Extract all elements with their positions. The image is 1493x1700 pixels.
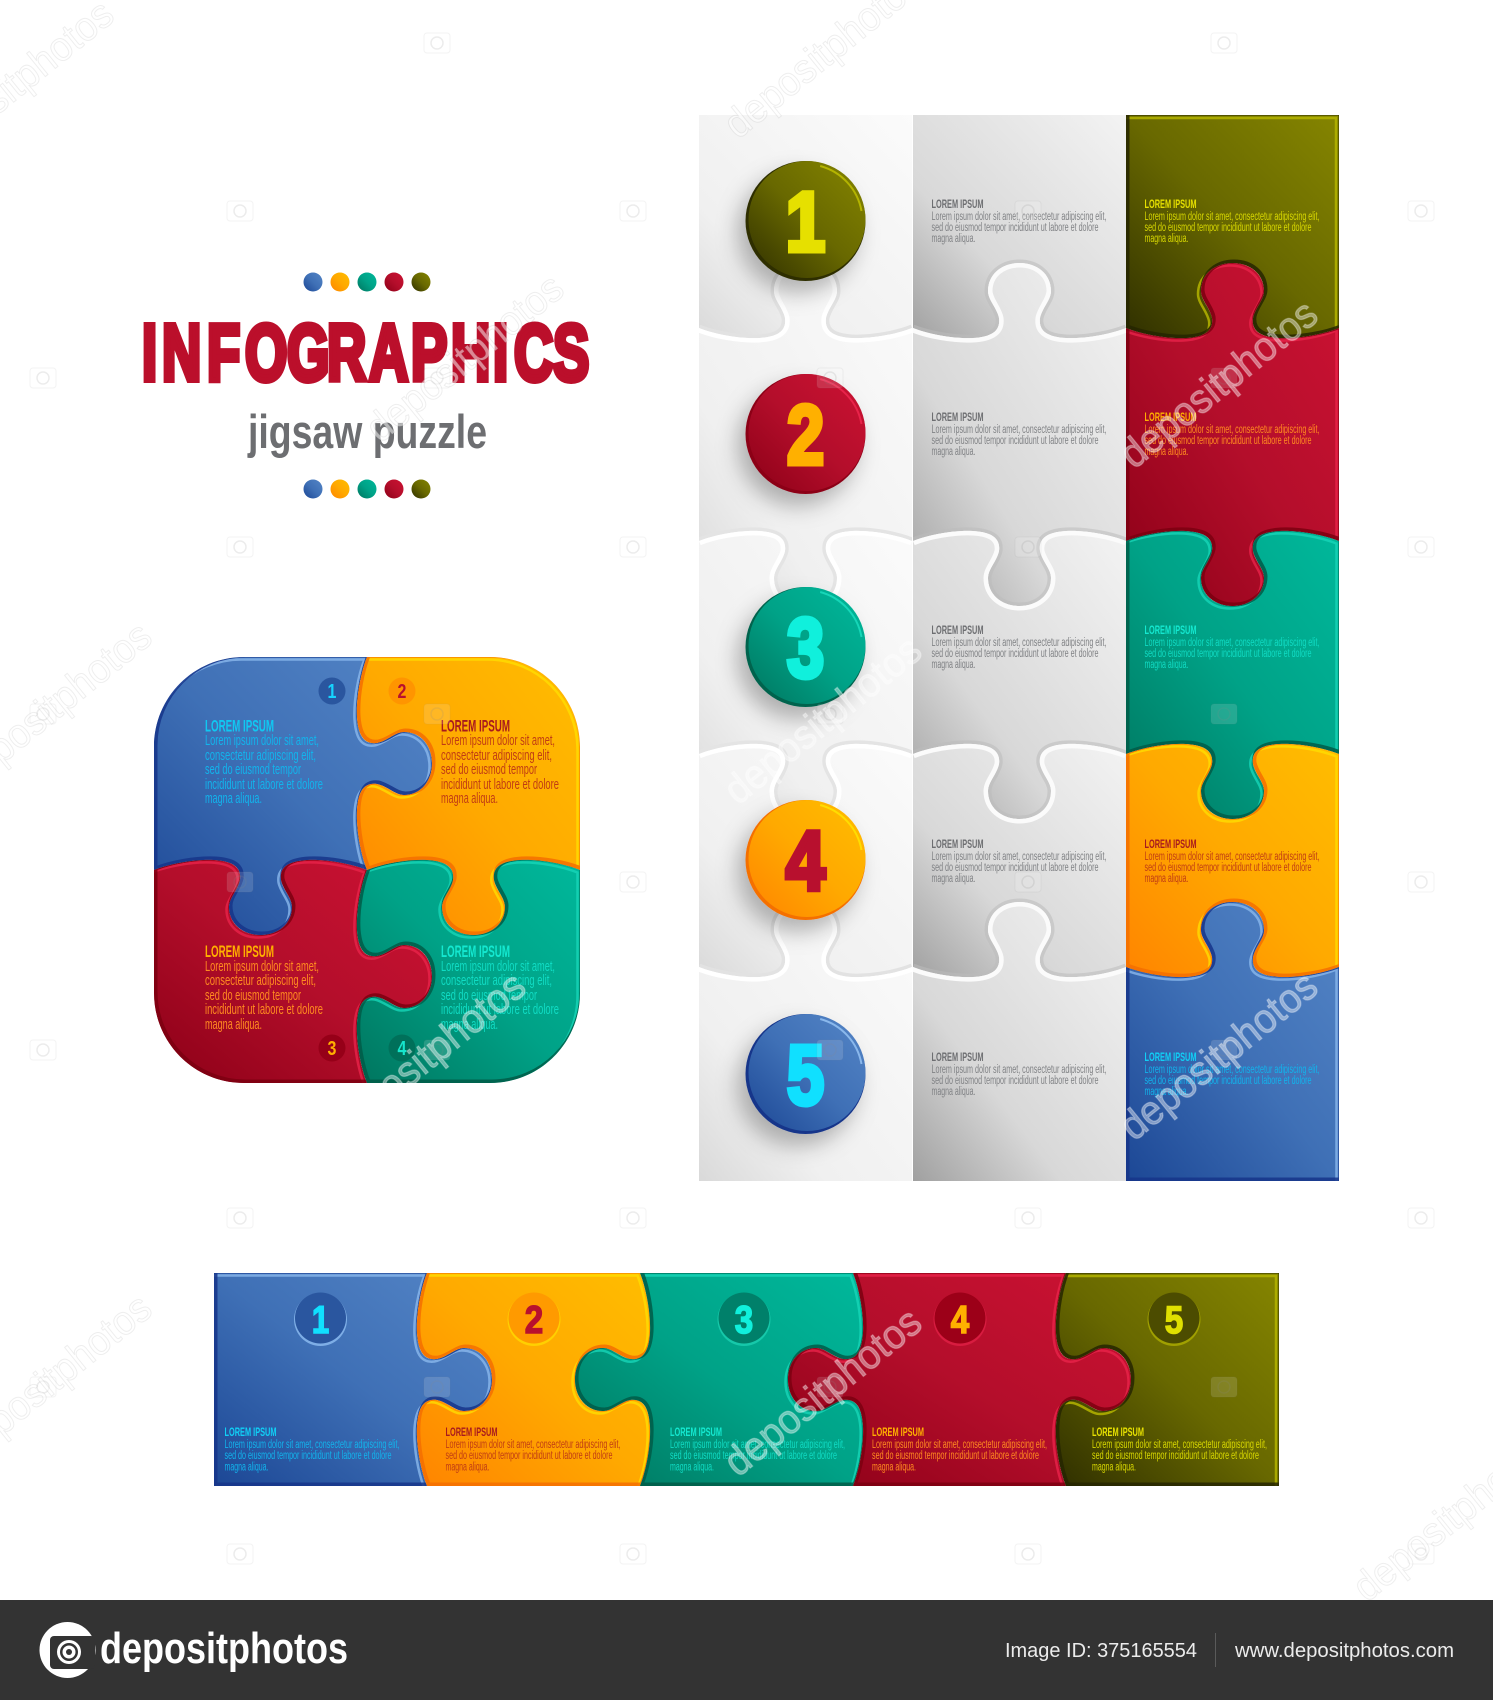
text blue: [1144, 1050, 1320, 1098]
text row 4: sed do eiusmod tempor incididunt ut labore et dolore: [932, 862, 1098, 874]
text row 4: Lorem ipsum dolor sit amet, consectetur adipiscing elit,: [932, 851, 1106, 863]
badge 4: 4: [398, 1037, 406, 1059]
text row 1: [932, 197, 1106, 245]
text: blue piece: Lorem ipsum dolor sit amet,: [205, 733, 319, 749]
strip text teal: [670, 1425, 845, 1474]
text teal: sed do eiusmod tempor incididunt ut labore et dolore: [1144, 648, 1312, 660]
badge 4: [388, 1034, 416, 1062]
strip text red: sed do eiusmod tempor incididunt ut labore et dolore: [872, 1450, 1039, 1462]
strip text yellow: magna aliqua.: [446, 1462, 490, 1474]
grey piece 5: [913, 902, 1126, 1181]
panel: vertical puzzle column coloured with text: [1123, 114, 1340, 1184]
text teal: Lorem ipsum dolor sit amet, consectetur adipiscing elit,: [1144, 637, 1320, 649]
yellow piece: [1124, 742, 1340, 980]
badge 2: 2: [398, 680, 406, 702]
image id: Image ID: 375165554: [1005, 1639, 1197, 1662]
text row 2: [932, 410, 1106, 458]
strip text red: LOREM IPSUM: [872, 1425, 924, 1439]
text olive: [1144, 197, 1320, 245]
text row 4: LOREM IPSUM: [932, 837, 984, 851]
strip text olive: Lorem ipsum dolor sit amet, consectetur adipiscing elit,: [1092, 1439, 1267, 1451]
website url: www.depositphotos.com: [1234, 1639, 1454, 1662]
text olive: Lorem ipsum dolor sit amet, consectetur adipiscing elit,: [1144, 211, 1320, 223]
strip badge 2: 2: [525, 1297, 543, 1342]
text red: [1144, 410, 1320, 458]
piece: yellow: [354, 656, 582, 938]
text: red piece: magna aliqua.: [205, 1017, 262, 1033]
text: teal piece: incididunt ut labore et dolore: [441, 1002, 559, 1018]
text row 5: magna aliqua.: [932, 1086, 975, 1098]
text red: sed do eiusmod tempor incididunt ut labore et dolore: [1144, 435, 1312, 447]
text: teal piece: magna aliqua.: [441, 1017, 498, 1033]
text teal: [1144, 623, 1320, 671]
badge 1: [318, 678, 346, 704]
white piece 2: [699, 288, 912, 594]
watermark: diagonal depositphotos text: depositphotos: [319, 962, 534, 1149]
text yellow: Lorem ipsum dolor sit amet, consectetur adipiscing elit,: [1144, 851, 1320, 863]
text olive: magna aliqua.: [1144, 233, 1188, 245]
strip badge 5: [1148, 1292, 1200, 1346]
strip badge 3: 3: [735, 1297, 753, 1342]
text row 1: LOREM IPSUM: [932, 197, 984, 211]
text: yellow piece: sed do eiusmod tempor: [441, 762, 537, 778]
number circle 3: [746, 587, 866, 707]
text olive: LOREM IPSUM: [1144, 197, 1196, 211]
watermark: diagonal depositphotos text: depositphotos: [715, 626, 930, 813]
panel: vertical puzzle column grey with text: [913, 115, 1126, 1181]
strip text blue: Lorem ipsum dolor sit amet, consectetur adipiscing elit,: [224, 1439, 400, 1451]
number circle 2: [746, 374, 866, 494]
badge 3: 3: [328, 1037, 336, 1059]
strip piece olive: [1053, 1272, 1280, 1489]
strip text red: [872, 1425, 1047, 1474]
number circle 5: [746, 1014, 866, 1134]
text row 3: sed do eiusmod tempor incididunt ut labore et dolore: [932, 648, 1098, 660]
text row 4: [932, 837, 1106, 885]
strip text olive: magna aliqua.: [1092, 1462, 1136, 1474]
number circle 1: [746, 161, 866, 281]
piece: blue: [152, 656, 434, 938]
text: blue piece: magna aliqua.: [205, 791, 262, 807]
strip text yellow: sed do eiusmod tempor incididunt ut labore et dolore: [446, 1450, 612, 1462]
watermark: diagonal depositphotos text: depositphotos: [715, 1298, 930, 1485]
white piece 5: [699, 902, 912, 1181]
text row 2: magna aliqua.: [932, 446, 975, 458]
text: teal piece: Lorem ipsum dolor sit amet,: [441, 959, 555, 975]
blue piece: [1124, 900, 1340, 1184]
badge 2: [388, 678, 416, 704]
text row 5: Lorem ipsum dolor sit amet, consectetur adipiscing elit,: [932, 1064, 1106, 1076]
text blue: sed do eiusmod tempor incididunt ut labore et dolore: [1144, 1075, 1312, 1087]
strip text teal: sed do eiusmod tempor incididunt ut labore et dolore: [670, 1450, 837, 1462]
text row 5: LOREM IPSUM: [932, 1050, 984, 1064]
text row 1: sed do eiusmod tempor incididunt ut labore et dolore: [932, 222, 1098, 234]
text yellow: [1144, 837, 1320, 885]
text: teal piece: consectetur adipiscing elit,: [441, 973, 552, 989]
panel: four piece square puzzle: [152, 656, 582, 1086]
text: blue piece: sed do eiusmod tempor: [205, 762, 301, 778]
grey piece 1: [913, 115, 1126, 338]
text row 5: sed do eiusmod tempor incididunt ut labore et dolore: [932, 1075, 1098, 1087]
heading: infographics: INFOGRAPHICS: [142, 309, 589, 398]
strip piece teal: [572, 1272, 865, 1488]
text row 3: LOREM IPSUM: [932, 623, 984, 637]
white piece 3: [699, 531, 912, 819]
strip text yellow: Lorem ipsum dolor sit amet, consectetur adipiscing elit,: [446, 1439, 620, 1451]
icon: depositphotos camera logo: [40, 1622, 96, 1678]
strip text red: Lorem ipsum dolor sit amet, consectetur adipiscing elit,: [872, 1439, 1047, 1451]
red piece: [1124, 262, 1340, 608]
text: blue piece: [205, 716, 323, 807]
text: yellow piece: [441, 716, 559, 807]
strip text blue: [224, 1425, 400, 1474]
text row 3: Lorem ipsum dolor sit amet, consectetur adipiscing elit,: [932, 637, 1106, 649]
text: blue piece: incididunt ut labore et dolore: [205, 777, 323, 793]
text red: LOREM IPSUM: [1144, 410, 1196, 424]
text: red piece: incididunt ut labore et dolore: [205, 1002, 323, 1018]
text teal: LOREM IPSUM: [1144, 623, 1196, 637]
grey piece 2: [913, 263, 1126, 606]
text olive: sed do eiusmod tempor incididunt ut labore et dolore: [1144, 222, 1312, 234]
olive piece: [1123, 114, 1340, 341]
text row 3: [932, 623, 1106, 671]
number circle 1: 1: [786, 174, 825, 269]
text row 2: Lorem ipsum dolor sit amet, consectetur adipiscing elit,: [932, 424, 1106, 436]
strip text yellow: LOREM IPSUM: [446, 1425, 498, 1439]
text: yellow piece: incididunt ut labore et dolore: [441, 777, 559, 793]
text: red piece: consectetur adipiscing elit,: [205, 973, 316, 989]
badge 1: 1: [328, 680, 336, 702]
strip text blue: LOREM IPSUM: [224, 1425, 276, 1439]
number circle 5: 5: [787, 1029, 824, 1123]
text: red piece: Lorem ipsum dolor sit amet,: [205, 959, 319, 975]
number circle 3: 3: [787, 602, 824, 696]
text row 5: [932, 1050, 1106, 1098]
text: blue piece: consectetur adipiscing elit,: [205, 748, 316, 764]
strip text olive: sed do eiusmod tempor incididunt ut labore et dolore: [1092, 1450, 1259, 1462]
text yellow: sed do eiusmod tempor incididunt ut labore et dolore: [1144, 862, 1312, 874]
text red: Lorem ipsum dolor sit amet, consectetur adipiscing elit,: [1144, 424, 1320, 436]
text blue: LOREM IPSUM: [1144, 1050, 1196, 1064]
dots row top: [304, 272, 430, 292]
text blue: magna aliqua.: [1144, 1086, 1188, 1098]
strip badge 3: [718, 1292, 770, 1346]
text yellow: magna aliqua.: [1144, 873, 1188, 885]
text teal: magna aliqua.: [1144, 659, 1188, 671]
subheading: jigsaw puzzle: jigsaw puzzle: [247, 405, 487, 458]
panel: horizontal puzzle strip: [212, 1272, 1280, 1489]
piece: teal: [354, 858, 582, 1086]
grey piece 4: [913, 744, 1126, 977]
badge 3: [318, 1034, 346, 1062]
strip badge 2: [508, 1292, 560, 1346]
footer bar: [0, 1600, 1493, 1700]
teal piece: [1124, 529, 1340, 822]
text row 2: sed do eiusmod tempor incididunt ut labore et dolore: [932, 435, 1098, 447]
text: red piece: [205, 942, 323, 1033]
strip text olive: [1092, 1425, 1267, 1474]
strip piece yellow: [414, 1272, 652, 1488]
strip piece blue: [212, 1272, 494, 1488]
text red: magna aliqua.: [1144, 446, 1188, 458]
strip badge 4: [934, 1292, 986, 1346]
text: yellow piece: Lorem ipsum dolor sit amet,: [441, 733, 555, 749]
strip text blue: magna aliqua.: [224, 1462, 268, 1474]
white piece 1: [699, 115, 912, 338]
brand wordmark: depositphotos: [100, 1624, 348, 1673]
text row 2: LOREM IPSUM: [932, 410, 984, 424]
strip text teal: LOREM IPSUM: [670, 1425, 722, 1439]
text row 1: Lorem ipsum dolor sit amet, consectetur adipiscing elit,: [932, 211, 1106, 223]
strip text teal: Lorem ipsum dolor sit amet, consectetur adipiscing elit,: [670, 1439, 845, 1451]
strip badge 4: 4: [951, 1297, 969, 1342]
watermark: diagonal depositphotos text: depositphotos: [357, 264, 572, 451]
text: red piece: LOREM IPSUM: [205, 942, 274, 961]
strip text red: magna aliqua.: [872, 1462, 916, 1474]
text: yellow piece: LOREM IPSUM: [441, 716, 510, 736]
text: teal piece: [441, 942, 559, 1033]
strip badge 1: 1: [312, 1299, 329, 1342]
text yellow: LOREM IPSUM: [1144, 837, 1196, 851]
text: red piece: sed do eiusmod tempor: [205, 988, 301, 1004]
white piece 4: [699, 744, 912, 977]
text row 1: magna aliqua.: [932, 233, 975, 245]
number circle 4: 4: [786, 813, 825, 908]
panel: title block: [142, 272, 589, 498]
text: yellow piece: consectetur adipiscing elit,: [441, 748, 552, 764]
number circle 4: [746, 800, 866, 920]
piece: red: [152, 858, 434, 1086]
text row 3: magna aliqua.: [932, 659, 975, 671]
watermark: diagonal depositphotos text: depositphotos: [1111, 290, 1326, 477]
text: yellow piece: magna aliqua.: [441, 791, 498, 807]
strip text yellow: [446, 1425, 620, 1474]
grey piece 3: [913, 531, 1126, 819]
strip text blue: sed do eiusmod tempor incididunt ut labore et dolore: [224, 1450, 392, 1462]
strip badge 1: [294, 1292, 347, 1346]
text row 4: magna aliqua.: [932, 873, 975, 885]
text blue: Lorem ipsum dolor sit amet, consectetur adipiscing elit,: [1144, 1064, 1320, 1076]
strip text teal: magna aliqua.: [670, 1462, 714, 1474]
strip text olive: LOREM IPSUM: [1092, 1425, 1144, 1439]
text: blue piece: LOREM IPSUM: [205, 716, 274, 736]
strip badge 5: 5: [1165, 1297, 1183, 1342]
strip piece red: [786, 1272, 1132, 1488]
number circle 2: 2: [787, 389, 824, 483]
text: teal piece: sed do eiusmod tempor: [441, 988, 537, 1004]
text: teal piece: LOREM IPSUM: [441, 942, 510, 961]
watermark: diagonal depositphotos text: depositphotos: [1111, 962, 1326, 1149]
dots row bottom: [304, 480, 430, 498]
panel: vertical puzzle column white with numbers: [699, 115, 912, 1181]
